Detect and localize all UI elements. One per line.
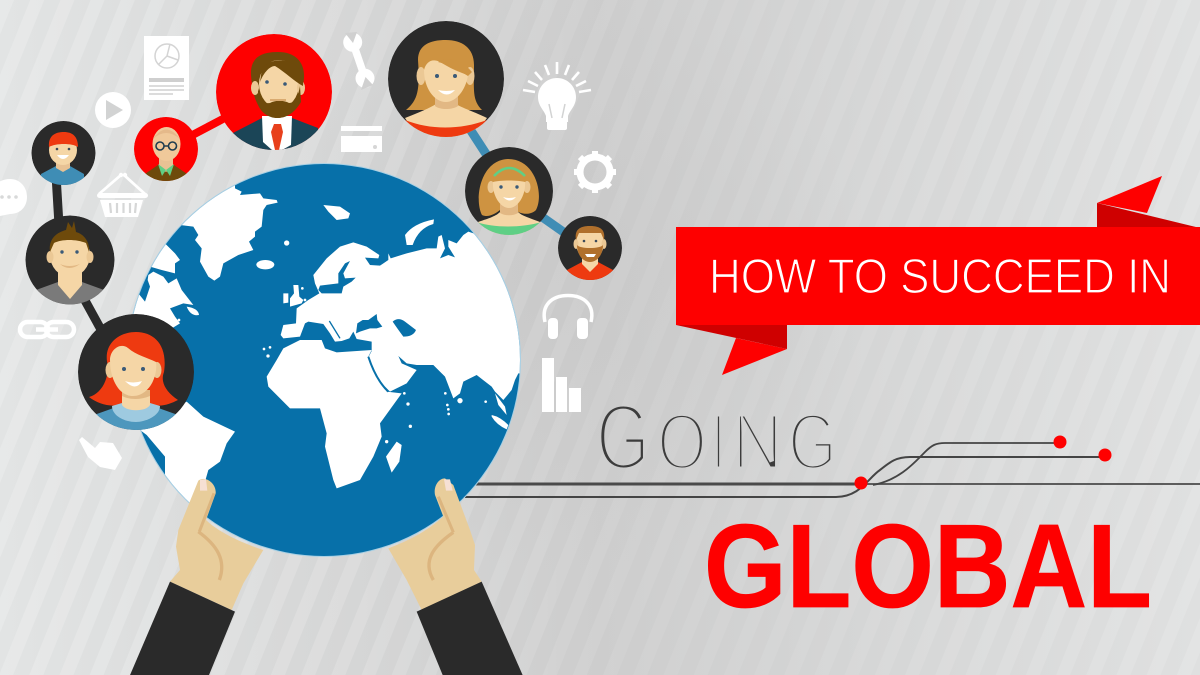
icon: credit card <box>341 126 382 152</box>
icon: bar chart <box>542 358 581 412</box>
right hand <box>388 478 523 675</box>
icon: wrench <box>343 32 374 90</box>
person: man with red beard <box>558 216 622 282</box>
continent: africa <box>267 340 402 488</box>
hands holding the globe <box>129 478 523 675</box>
icon: pointing hand <box>79 437 122 470</box>
continent: north america <box>134 244 199 328</box>
continent: greenland <box>182 186 278 281</box>
connector: blue <box>464 120 572 238</box>
person: boy with red hair <box>32 121 96 186</box>
heading: going: N <box>732 397 783 486</box>
icon: chat bubble <box>0 179 27 216</box>
globe <box>132 163 521 557</box>
heading: going: G <box>596 385 650 489</box>
icon: gear <box>574 151 616 193</box>
connector: black <box>56 175 104 335</box>
icon: headphones <box>544 296 592 339</box>
continent: south america <box>140 402 235 510</box>
heading: going: I <box>713 397 724 486</box>
icon: play button <box>95 92 131 128</box>
islands <box>256 260 274 269</box>
person: woman with long blonde hair <box>388 21 504 145</box>
person: bearded man in suit <box>216 34 332 152</box>
icon: document <box>144 36 189 100</box>
heading: going: O <box>657 397 707 486</box>
icon: shopping basket <box>97 173 148 217</box>
left hand <box>129 479 263 675</box>
person: man with spiky hair <box>26 216 114 306</box>
connector lines and red nodes <box>465 436 1200 497</box>
continent: eurasia <box>280 232 520 400</box>
heading: global: GLOBAL <box>704 500 1152 633</box>
person: woman with red hair <box>78 314 194 432</box>
person: bald man with glasses <box>134 117 198 183</box>
ribbon banner <box>676 176 1200 375</box>
heading: going <box>601 406 830 468</box>
person: woman with green headband <box>465 147 553 240</box>
connector: red <box>166 92 274 149</box>
heading: going: G <box>788 397 837 486</box>
seas and gulfs <box>318 261 416 337</box>
icon: chain link <box>20 322 74 337</box>
icon: light bulb <box>523 62 591 130</box>
